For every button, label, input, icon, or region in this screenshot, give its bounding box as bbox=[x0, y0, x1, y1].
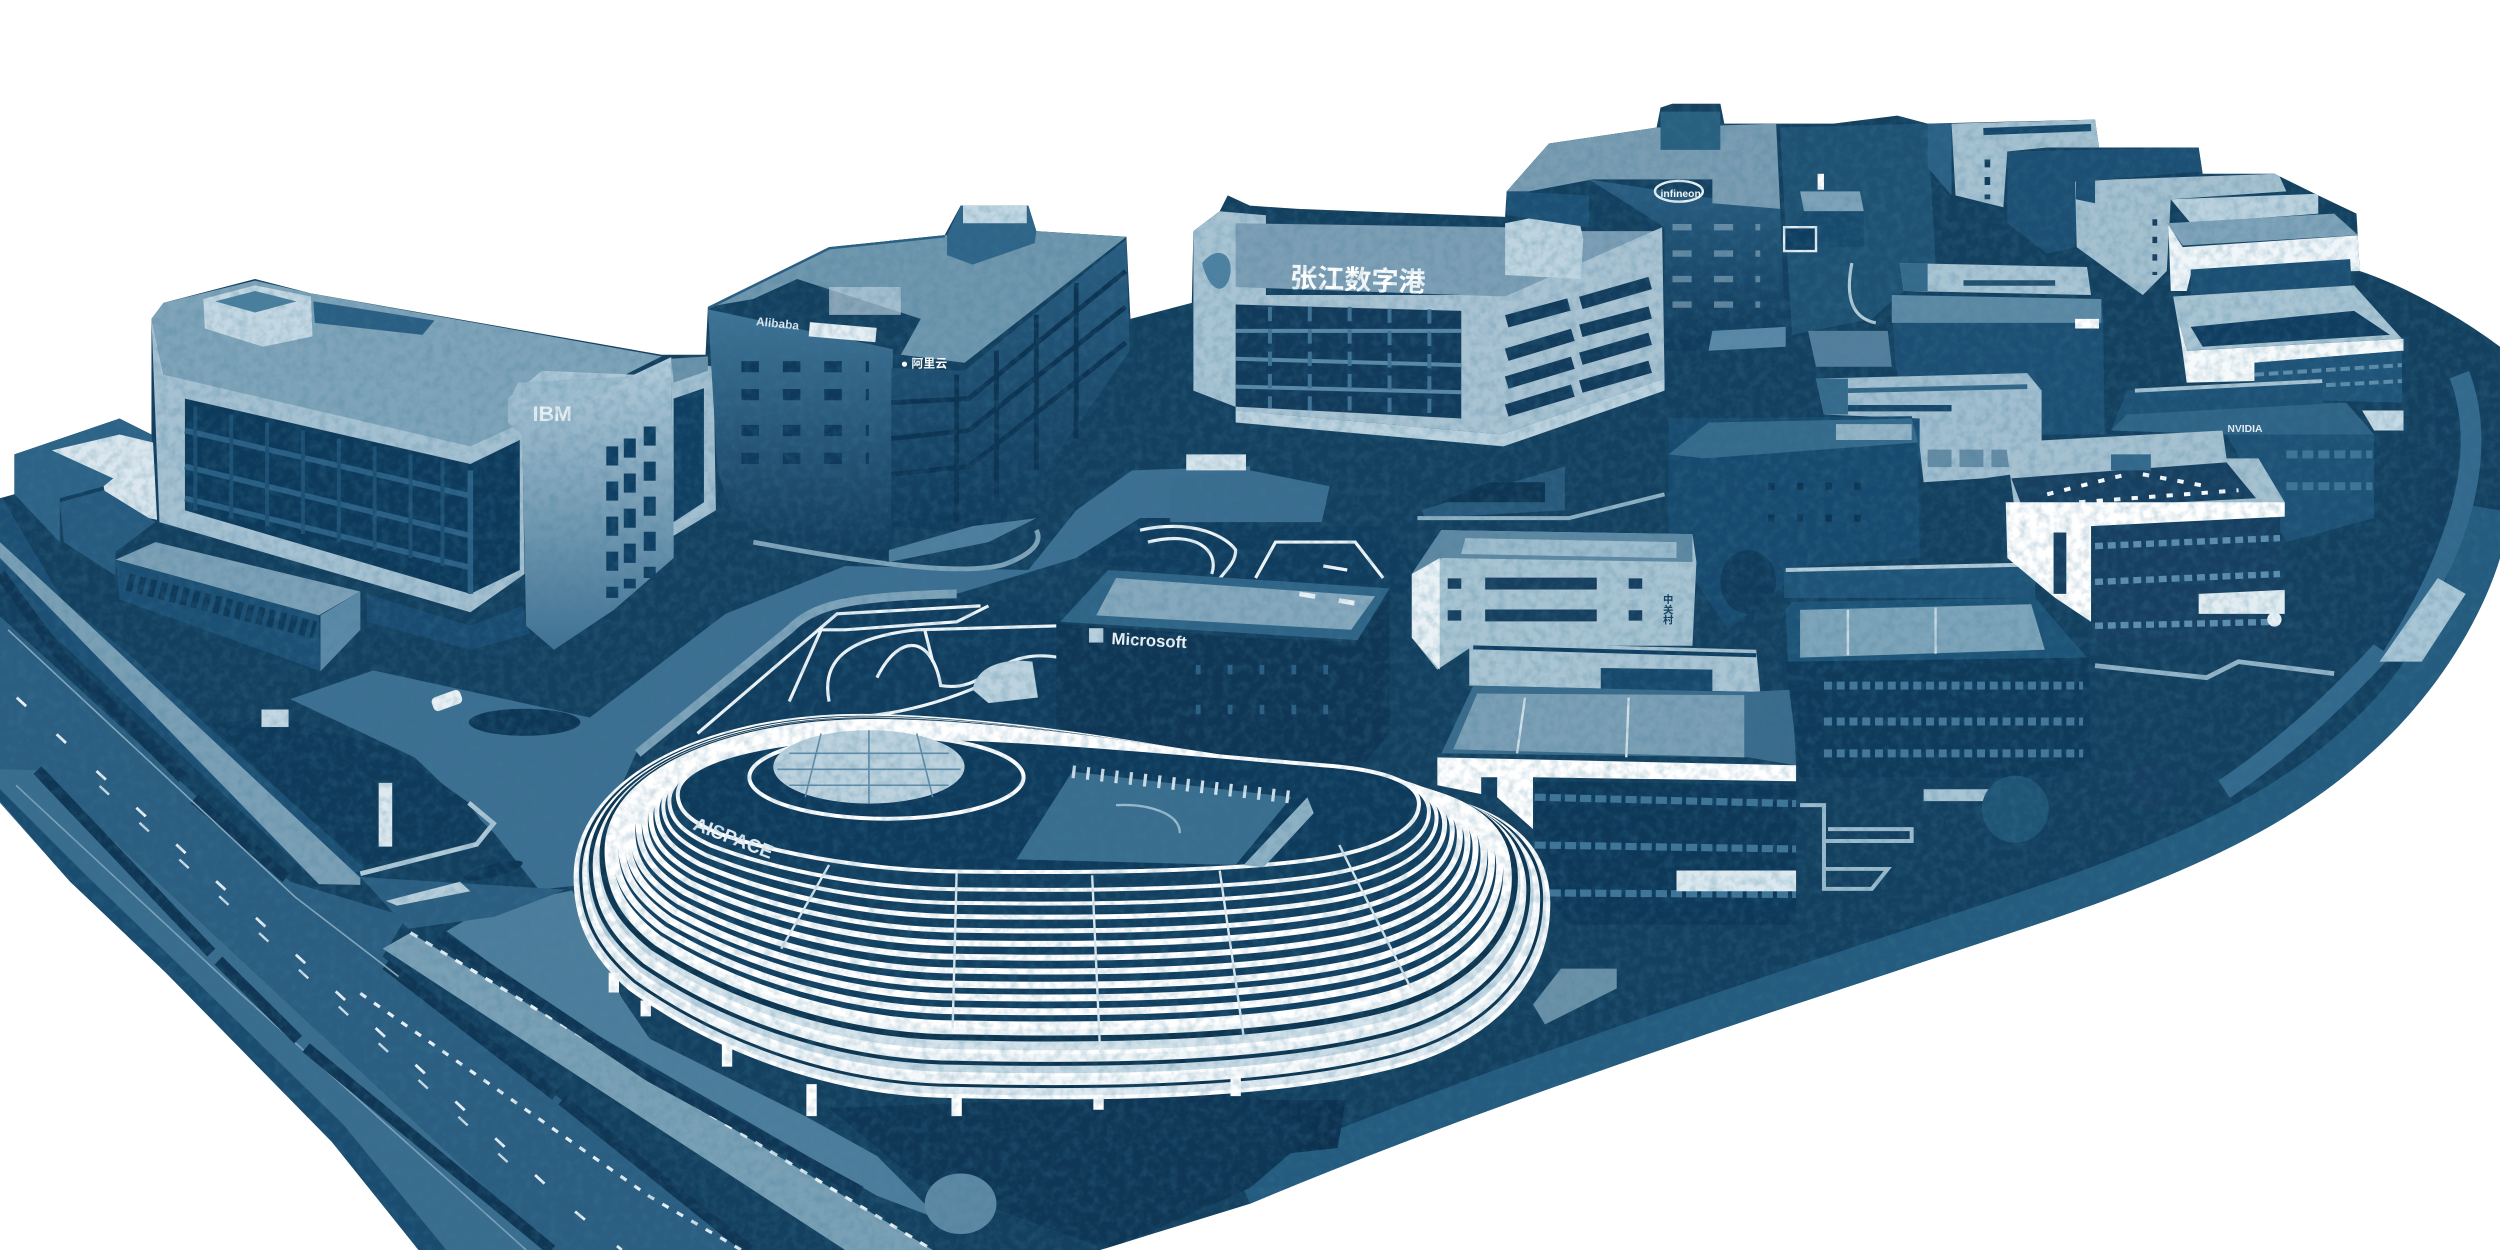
building: roofed central-right block bbox=[1784, 564, 2091, 777]
ring building bbox=[576, 716, 1548, 1116]
southern perimeter lawn band bbox=[1250, 510, 2500, 1204]
autonomous driving test track bbox=[638, 518, 1419, 753]
roadside fence strip bbox=[0, 542, 941, 1250]
hillside and small annex bbox=[1780, 124, 1936, 367]
perimeter footpath bbox=[2224, 375, 2471, 789]
logo: IBM: IBM bbox=[533, 402, 572, 426]
building: light office block bbox=[1816, 373, 2042, 482]
building: dark central block bbox=[1892, 263, 2105, 478]
vertical sign: 中关村 bbox=[1661, 593, 1673, 625]
ring facade bbox=[576, 716, 1548, 1097]
west lawn behind road bbox=[0, 494, 365, 884]
logo: Infineon: infineon bbox=[1661, 189, 1701, 200]
plaza and entrance roads bbox=[290, 466, 1250, 929]
rooftop basketball court bbox=[1016, 772, 1314, 867]
building: NVIDIA bbox=[2111, 379, 2404, 542]
rooftop sign: 张江数字港 bbox=[1290, 262, 1426, 298]
logo: Microsoft: Microsoft bbox=[1111, 629, 1188, 652]
building: low wing west bbox=[14, 419, 360, 671]
lower canopy and trees bbox=[829, 1092, 1315, 1250]
building: light block with vertical sign bbox=[1412, 530, 1696, 670]
ring mullions bbox=[781, 845, 1411, 1052]
buildings: north-east cluster bbox=[1928, 120, 2404, 403]
landscape details bbox=[1250, 612, 2282, 1164]
central garden bbox=[262, 690, 580, 906]
building: Zhangjiang tower bbox=[1193, 209, 1665, 446]
road lane markings bbox=[8, 630, 741, 1250]
building: Microsoft bbox=[1056, 570, 1390, 773]
ring columns bbox=[614, 973, 1236, 1116]
building: front white block bbox=[1437, 642, 1999, 925]
roof dome bbox=[749, 730, 1024, 819]
main road bbox=[0, 616, 749, 1250]
logo: Infineon bbox=[1655, 181, 1703, 202]
building: Infineon bbox=[1507, 112, 1786, 351]
rooftop sign band bbox=[809, 322, 877, 342]
building: dark tall block bbox=[1669, 416, 1920, 630]
logo: Alibaba Cloud: ● 阿里云 bbox=[901, 357, 947, 371]
building: Alibaba bbox=[708, 204, 1130, 562]
logo: NVIDIA: NVIDIA bbox=[2227, 424, 2263, 435]
ground-level annex bbox=[1170, 454, 1665, 522]
logo: Alibaba: Alibaba bbox=[755, 314, 800, 333]
building: IBM bbox=[151, 281, 716, 650]
ring facade lettering: AISPACE bbox=[690, 814, 776, 864]
building: north-east block with white frame bbox=[2006, 430, 2334, 678]
road median hedges bbox=[0, 574, 749, 1250]
